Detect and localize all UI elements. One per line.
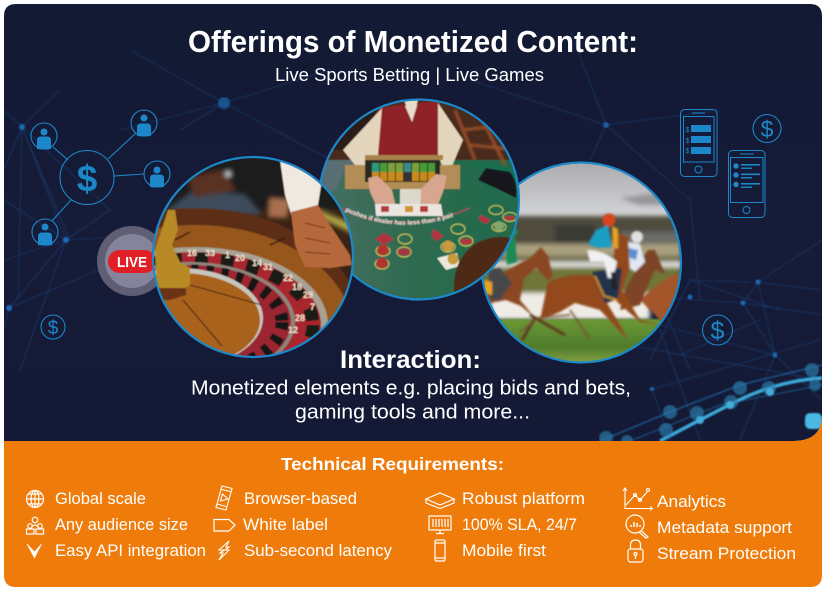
icon: dollar lower right: $ [711, 317, 725, 345]
column 3 requirements [426, 489, 585, 561]
label: Analytics: Analytics [657, 492, 726, 511]
icon: phone with dollar rows [680, 110, 717, 176]
heading: Interaction: Interaction: [340, 346, 481, 374]
column 4 requirements [623, 488, 796, 563]
icon: check mark [27, 544, 42, 558]
label: Easy API integration: Easy API integration [55, 541, 206, 560]
icon: phone with dollar rows: $ [686, 138, 690, 145]
icon: phone with dollar rows: $ [686, 127, 690, 134]
column 1 requirements [26, 489, 206, 560]
icon: padlock [628, 540, 643, 562]
numbers on wheel: 12 [288, 325, 298, 335]
cards [375, 204, 443, 216]
numbers on wheel: 20 [235, 253, 245, 263]
glowing strand bottom right [599, 363, 822, 447]
numbers on wheel: 31 [263, 262, 273, 272]
panel: orange technical requirements background [4, 415, 822, 587]
photo: roulette wheel [152, 156, 354, 358]
text block: interaction description: Monetized elements e.g. placing bids and bets, [191, 376, 631, 400]
label: Robust platform: Robust platform [462, 489, 585, 508]
network lines: background mesh [4, 30, 822, 440]
icon: video phone [216, 486, 232, 510]
label: 100% SLA, 24/7: 100% SLA, 24/7 [462, 515, 577, 534]
icon: lightning [219, 541, 229, 560]
icon: audience [26, 517, 44, 534]
label: Metadata support: Metadata support [657, 518, 792, 537]
title: Offerings of Monetized Content: [188, 24, 638, 59]
icon: dollar network with audience [31, 110, 170, 246]
numbers on wheel: 14 [252, 258, 262, 268]
icon: dollar network with audience: $ [77, 158, 98, 199]
icon: tag [214, 520, 235, 531]
icon: monitor [429, 516, 451, 534]
gold post [155, 210, 190, 295]
label: Stream Protection: Stream Protection [657, 544, 796, 563]
icon: platform [426, 493, 454, 508]
icon: dollar top right [753, 114, 781, 142]
icon: dollar lower right [702, 315, 732, 345]
column 2 requirements [214, 486, 392, 560]
foreground horse and jockey [454, 236, 510, 292]
photo: horse racing [480, 160, 682, 365]
horse third [640, 273, 678, 325]
label: Mobile first: Mobile first [462, 541, 546, 560]
rider back [626, 242, 645, 272]
horse left [483, 247, 553, 318]
table lettering: pushes if dealer has less than a pair [344, 207, 454, 226]
icon: small dollar left [41, 315, 65, 339]
numbers on wheel: 1 [225, 250, 230, 260]
icon: small dollar left: $ [48, 318, 59, 339]
icon: magnifier [626, 515, 648, 538]
numbers on wheel: 16 [187, 248, 197, 258]
outer silver ring [154, 246, 328, 330]
icon: LIVE badge [97, 226, 167, 296]
dealer [342, 102, 464, 166]
icon: dollar top right: $ [761, 116, 774, 142]
number ring [154, 252, 320, 338]
icon: LIVE badge: LIVE [117, 254, 147, 271]
text block: interaction description [191, 376, 631, 424]
text block: interaction description: gaming tools and more... [295, 400, 530, 424]
wheel wood [158, 208, 349, 296]
numbers on wheel: 28 [295, 313, 305, 323]
icon: phone with list rows [728, 150, 765, 218]
icon: mobile [435, 540, 445, 561]
betting circles [375, 206, 517, 269]
numbers on wheel: 22 [283, 273, 293, 283]
icon: globe [26, 490, 44, 508]
numbers on wheel: 29 [303, 290, 313, 300]
icon: phone with dollar rows: $ [686, 148, 690, 155]
icon: analytics chart [623, 488, 652, 510]
panel: dark network background [4, 4, 822, 447]
label: Browser-based: Browser-based [244, 489, 357, 508]
numbers on wheel: 7 [310, 302, 315, 312]
subtitle: Live Sports Betting | Live Games [275, 65, 544, 85]
numbers on wheel: 18 [292, 282, 302, 292]
network nodes [6, 97, 778, 391]
label: Any audience size: Any audience size [55, 515, 188, 534]
heading: Technical Requirements: Technical Requirements: [281, 454, 504, 474]
label: White label: White label [243, 515, 328, 534]
sleeve and hand [280, 160, 322, 217]
label: Global scale: Global scale [55, 489, 146, 508]
numbers on wheel: 33 [205, 248, 215, 258]
chip tray [345, 165, 460, 189]
label: Sub-second latency: Sub-second latency [244, 541, 392, 560]
photo: blackjack table [320, 98, 520, 301]
numbers on wheel [187, 248, 315, 335]
horse center [540, 233, 662, 340]
jockey center [587, 250, 617, 278]
